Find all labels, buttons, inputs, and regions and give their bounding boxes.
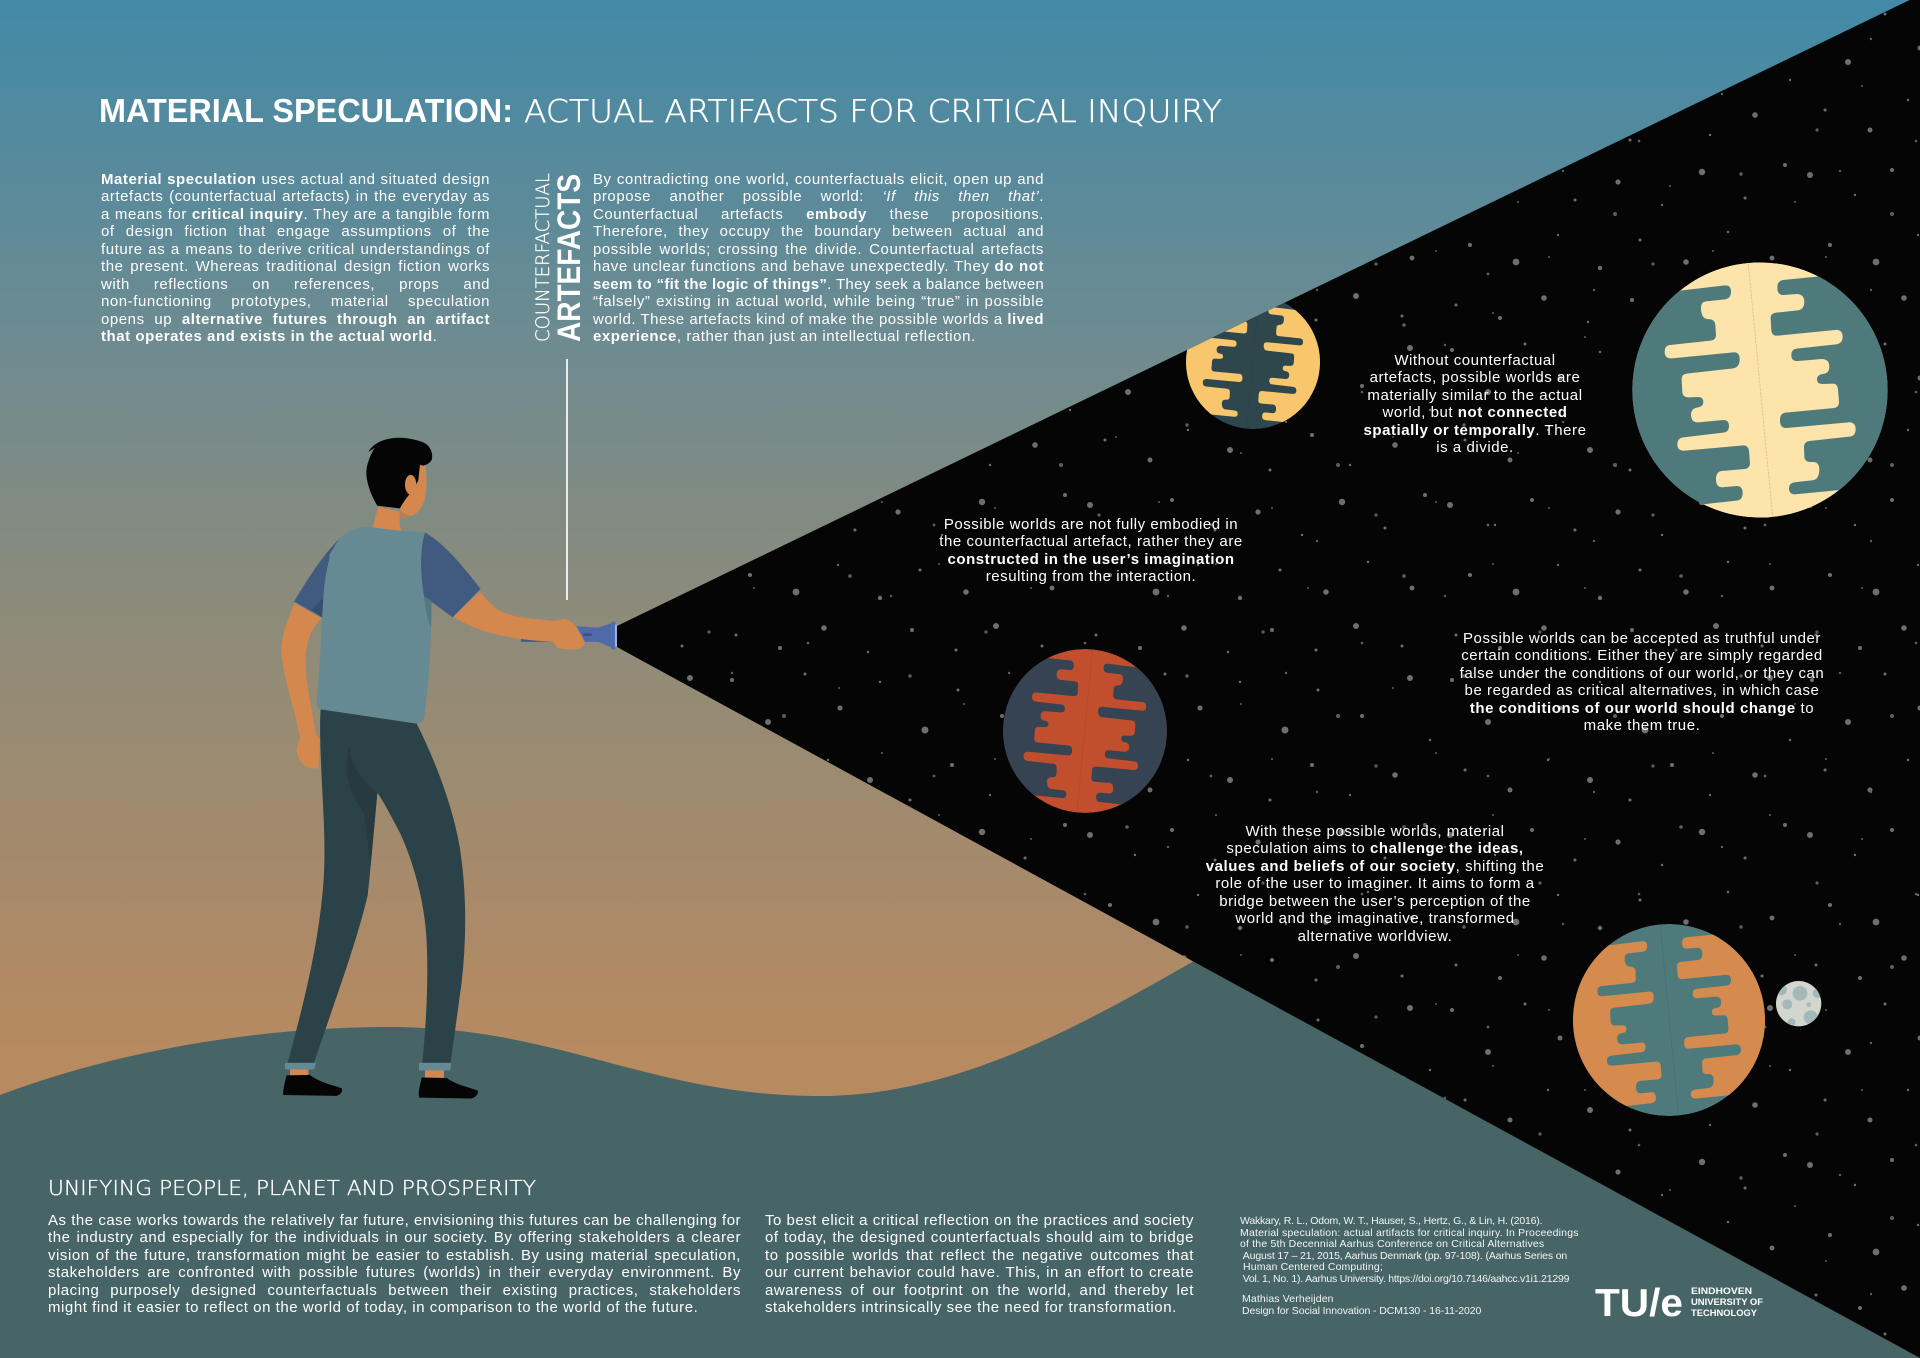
vertical heading: counterfactual artefacts (532, 173, 587, 342)
text block: challenge the ideas: role of the user to imaginer. It aims to form a (1215, 875, 1535, 892)
text block: possible worlds truthful: be regarded as critical alternatives, in which case (1465, 682, 1819, 699)
pointer line (566, 359, 568, 600)
text block: material speculation intro: the present. Whereas traditional design fiction works (101, 258, 490, 275)
text block: challenge the ideas: bridge between the user’s perception of the (1219, 893, 1531, 910)
text block: possible worlds truthful: false under the conditions of our world, or they can (1460, 665, 1824, 682)
text block: material speculation intro: Material speculation uses actual and situated design (101, 171, 490, 188)
text block: possible worlds imagination: the counterfactual artefact, rather they are (939, 533, 1243, 550)
text block: counterfactual artefacts: “falsely” existing in actual world, while being “true” in possible (593, 293, 1044, 310)
planet: yellow (1186, 303, 1320, 429)
feet and shoes (283, 1063, 478, 1099)
ear (405, 475, 416, 495)
author credit: Design for Social Innovation - DCM130 - 16-11-2020 (1242, 1305, 1481, 1317)
right arm and hand (453, 592, 585, 650)
text block: possible worlds imagination (939, 516, 1243, 585)
text block: without counterfactual artefacts: spatially or temporally. There (1364, 422, 1586, 439)
text block: without counterfactual artefacts: world, but not connected (1383, 404, 1567, 421)
text block: unifying paragraph one: As the case works towards the relatively far future, envisioning this futures can be challenging for (48, 1212, 741, 1229)
hair (366, 438, 432, 508)
left arm (281, 603, 322, 769)
text block: counterfactual artefacts: Counterfactual artefacts embody these propositions. (593, 206, 1044, 223)
text block: possible worlds imagination: Possible worlds are not fully embodied in (944, 516, 1238, 533)
flashlight beam with stars (617, 0, 1920, 1358)
person holding flashlight (281, 438, 617, 1099)
planet: orange (1572, 924, 1765, 1116)
references: August 17 – 21, 2015, Aarhus Denmark (pp. 97-108). (Aarhus Series on (1243, 1250, 1567, 1262)
TU/e logo: UNIVERSITY OF (1691, 1297, 1763, 1308)
references: Vol. 1, No. 1). Aarhus University. https://doi.org/10.7146/aahcc.v1i1.21299 (1243, 1273, 1569, 1285)
pants (288, 709, 465, 1063)
text block: possible worlds truthful: Possible worlds can be accepted as truthful under (1463, 630, 1821, 647)
text block: counterfactual artefacts: possible worlds; crossing the divide. Counterfactual artefacts (593, 241, 1044, 258)
text block: challenge the ideas: values and beliefs of our society, shifting the (1206, 858, 1544, 875)
text block: unifying paragraph one: vision of the future, transformation might be easier to establish. By using material speculation, (48, 1247, 741, 1264)
text block: challenge the ideas: world and the imaginative, transformed (1235, 910, 1515, 927)
sleeves (294, 532, 481, 618)
text block: material speculation intro: opens up alternative futures through an artifact (101, 310, 490, 328)
vertical heading: counterfactual artefacts: ARTEFACTS (551, 174, 587, 342)
text block: counterfactual artefacts: seem to “fit the logic of things”. They seek a balance between (593, 276, 1044, 293)
text block: possible worlds imagination: resulting from the interaction. (986, 568, 1196, 585)
references: Human Centered Computing; (1243, 1261, 1383, 1273)
face (398, 465, 426, 516)
planets inside the beam (982, 262, 1920, 1116)
ground hill (0, 961, 1920, 1358)
text block: counterfactual artefacts: Therefore, they occupy the boundary between actual and (593, 223, 1044, 240)
text block: unifying paragraph two: to possible worlds that reflect the negative outcomes that (765, 1247, 1194, 1264)
vertical heading: counterfactual artefacts: COUNTERFACTUAL (532, 173, 554, 342)
text block: material speculation intro: future as a means to derive critical understandings of (101, 241, 490, 258)
author credit (1242, 1293, 1481, 1317)
text block: challenge the ideas (1206, 823, 1544, 945)
title (99, 92, 1222, 130)
references: Material speculation: actual artifacts for critical inquiry. In Proceedings (1240, 1227, 1579, 1239)
text block: without counterfactual artefacts: materially similar to the actual (1367, 387, 1583, 404)
planet: large cream (1632, 262, 1888, 518)
text block: counterfactual artefacts: propose another possible world: ‘If this then that’. (593, 188, 1044, 205)
neck (373, 507, 402, 532)
text block: possible worlds truthful: make them true. (1584, 717, 1700, 734)
text block: possible worlds imagination: constructed in the user’s imagination (947, 551, 1235, 568)
section heading: unifying: UNIFYING PEOPLE, PLANET AND PROSPERITY (48, 1176, 536, 1200)
text block: material speculation intro: artefacts (counterfactual artefacts) in the everyday as (101, 188, 490, 205)
text block: possible worlds truthful: the conditions of our world should change to (1470, 700, 1814, 717)
text block: without counterfactual artefacts (1364, 352, 1586, 456)
text block: without counterfactual artefacts: Without counterfactual (1394, 352, 1556, 369)
text block: material speculation intro: that operates and exists in the actual world. (101, 328, 438, 345)
planet: red (1003, 649, 1167, 813)
references: of the 5th Decennial Aarhus Conference on Critical Alternatives (1240, 1238, 1544, 1250)
text block: material speculation intro: of design fiction that engage assumptions of the (101, 223, 490, 240)
text block: unifying paragraph one: might find it easier to reflect on the world of today, in comparison to the world of the future. (48, 1299, 698, 1316)
text block: unifying paragraph two: our current behavior could have. This, in an effort to create (765, 1264, 1194, 1281)
t-shirt (316, 527, 432, 724)
text block: material speculation intro: a means for critical inquiry. They are a tangible form (101, 206, 490, 223)
text block: without counterfactual artefacts: artefacts, possible worlds are (1370, 369, 1580, 386)
TU/e logo: TU/e (1595, 1282, 1683, 1325)
text block: material speculation intro: non-functioning prototypes, material speculation (101, 293, 490, 310)
text block: challenge the ideas: With these possible worlds, material (1245, 823, 1505, 840)
text block: unifying paragraph two (765, 1212, 1194, 1316)
text block: unifying paragraph two: awareness of our footprint on the world, and thereby let (765, 1282, 1194, 1299)
text block: challenge the ideas: alternative worldview. (1298, 928, 1452, 945)
text block: without counterfactual artefacts: is a divide. (1436, 439, 1514, 456)
moon (1776, 981, 1822, 1026)
text block: unifying paragraph two: stakeholders intrinsically see the need for transformation. (765, 1299, 1177, 1316)
text block: possible worlds truthful (1460, 630, 1824, 734)
TU/e logo: TECHNOLOGY (1691, 1308, 1758, 1319)
text block: unifying paragraph two: of today, the designed counterfactuals should aim to bridge (765, 1229, 1194, 1246)
flashlight (521, 622, 617, 649)
text block: unifying paragraph one: stakeholders are confronted with possible futures (worlds) in their everyday environment. By (48, 1264, 741, 1281)
text block: challenge the ideas: speculation aims to challenge the ideas, (1226, 840, 1524, 857)
text block: counterfactual artefacts: world. These artefacts kind of make the possible worlds a lived (593, 310, 1044, 328)
text block: material speculation intro (101, 171, 490, 345)
title: ACTUAL ARTIFACTS FOR CRITICAL INQUIRY (524, 94, 1222, 130)
text block: unifying paragraph one (48, 1212, 741, 1316)
text block: counterfactual artefacts: have unclear functions and behave unexpectedly. They do not (593, 258, 1044, 275)
TU/e logo: EINDHOVEN (1691, 1286, 1752, 1297)
title: MATERIAL SPECULATION: (99, 92, 513, 129)
text block: counterfactual artefacts (593, 171, 1044, 345)
text block: counterfactual artefacts: experience, rather than just an intellectual reflection. (593, 328, 976, 345)
text block: possible worlds truthful: certain conditions. Either they are simply regarded (1461, 647, 1823, 664)
text block: unifying paragraph one: placing purposely designed counterfactuals between their existing practices, stakeholders (48, 1282, 741, 1299)
author credit: Mathias Verheijden (1242, 1293, 1334, 1305)
text block: unifying paragraph two: To best elicit a critical reflection on the practices and society (765, 1212, 1194, 1229)
references: Wakkary, R. L., Odom, W. T., Hauser, S., Hertz, G., & Lin, H. (2016). (1240, 1215, 1542, 1227)
text block: counterfactual artefacts: By contradicting one world, counterfactuals elicit, open up and (593, 171, 1044, 188)
TU/e logo (1595, 1282, 1763, 1325)
references (1240, 1215, 1579, 1285)
text block: unifying paragraph one: the industry and especially for the individuals in our society. By offering stakeholders a clearer (48, 1229, 741, 1246)
text block: material speculation intro: with reflections on references, props and (101, 276, 490, 293)
